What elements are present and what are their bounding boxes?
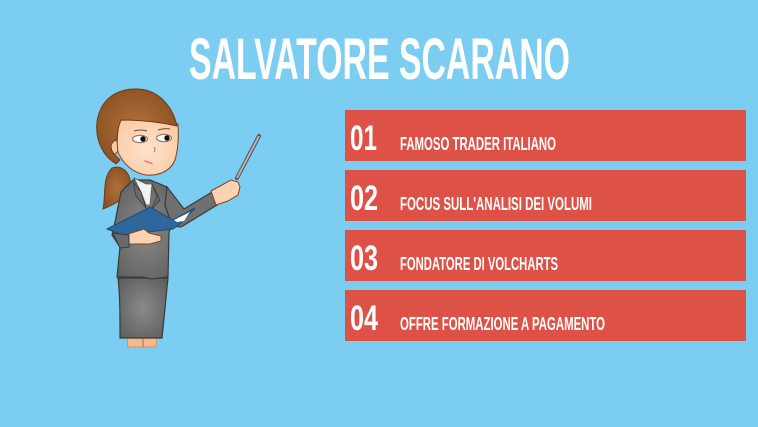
legs — [127, 336, 157, 347]
ear — [110, 140, 118, 154]
list item 01: 01 — [350, 119, 377, 158]
list item 01: FAMOSO TRADER ITALIANO — [400, 133, 556, 154]
pointer — [237, 136, 259, 178]
skirt — [118, 278, 168, 338]
right arm — [165, 187, 217, 227]
illustration: teacher woman with pointer and book — [97, 89, 259, 347]
list item 03: 03 — [350, 239, 378, 278]
list item 03: FONDATORE DI VOLCHARTS — [400, 253, 558, 274]
hand with pointer — [211, 180, 240, 205]
jacket — [112, 180, 180, 279]
list item 02 — [345, 170, 746, 221]
open book — [107, 207, 195, 235]
list item 04: OFFRE FORMAZIONE A PAGAMENTO — [400, 313, 605, 334]
list item 02: FOCUS SULL'ANALISI DEI VOLUMI — [400, 193, 592, 214]
face — [117, 118, 178, 175]
hair — [97, 89, 177, 164]
lapels — [133, 182, 160, 210]
eyebrows — [134, 129, 170, 131]
shirt collar — [134, 178, 152, 205]
list item 01 — [345, 110, 746, 161]
left cuff — [113, 233, 129, 248]
book pages — [174, 212, 190, 222]
list item 04 — [345, 290, 746, 341]
list item 03 — [345, 230, 746, 281]
eyes — [132, 135, 148, 143]
holding hand — [128, 229, 161, 244]
nose — [154, 147, 155, 152]
ponytail — [103, 167, 130, 209]
list item 02: 02 — [350, 179, 378, 218]
mouth — [145, 161, 152, 164]
list item 04: 04 — [350, 299, 378, 338]
